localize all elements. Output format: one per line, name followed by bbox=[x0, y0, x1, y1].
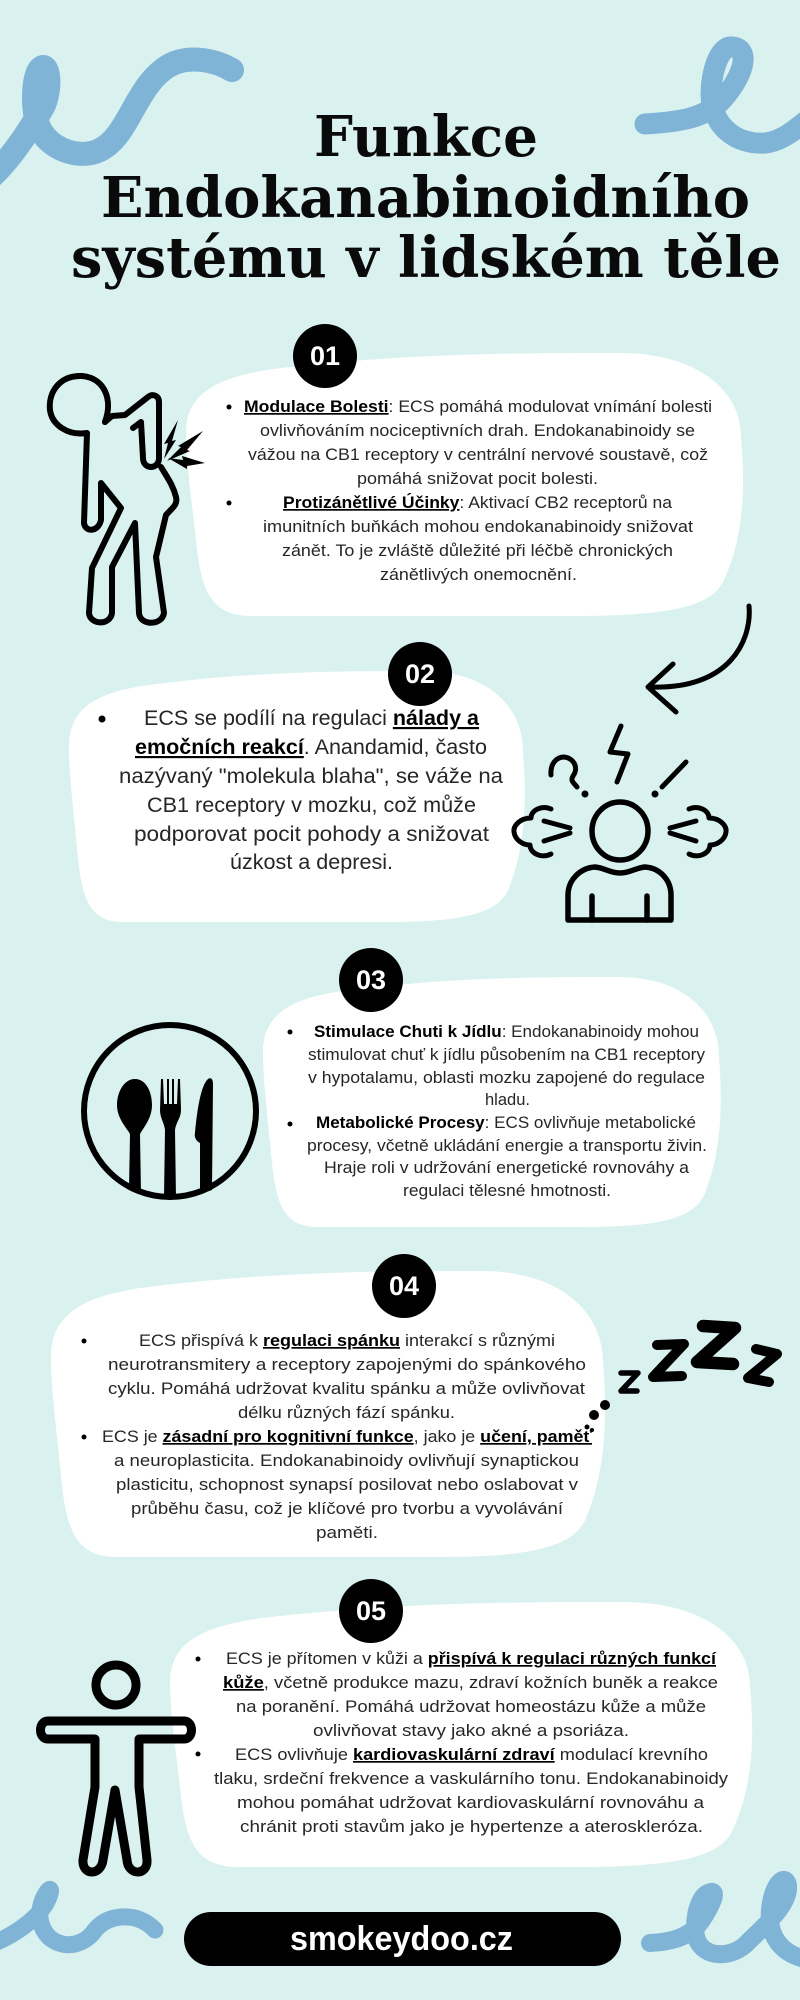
badge 05 bbox=[339, 1579, 403, 1643]
footer pill: website bbox=[184, 1912, 621, 1966]
squiggle: bottom left bbox=[0, 1889, 155, 1945]
squiggle: top right bbox=[645, 47, 800, 143]
text block 03 bbox=[288, 1022, 707, 1200]
footer pill: website: smokeydoo.cz bbox=[290, 1920, 513, 1958]
text block 03: Metabolické Procesy: ECS ovlivňuje metabolické bbox=[316, 1113, 696, 1132]
text block 02: nazývaný "molekula blaha", se váže na bbox=[119, 764, 503, 788]
text block 02: podporovat pocit pohody a snižovat bbox=[134, 822, 489, 846]
text block 03: v hypotalamu, oblasti mozku zapojené do regulace bbox=[308, 1068, 705, 1087]
text block 04: ECS přispívá k regulaci spánku interakcí s různými bbox=[139, 1331, 555, 1350]
text block 03: procesy, včetně ukládání energie a transportu živin. bbox=[307, 1136, 707, 1155]
text block 01: zánět. To je zvláště důležité při léčbě chronických bbox=[282, 541, 673, 560]
title: Funkce bbox=[314, 104, 538, 170]
text block 04: cyklu. Pomáhá udržovat kvalitu spánku a může ovlivňovat bbox=[108, 1379, 585, 1398]
text block 01: imunitních buňkách mohou endokanabinoidy snižovat bbox=[263, 517, 693, 536]
text block 01 bbox=[226, 397, 712, 584]
text block 03: hladu. bbox=[485, 1090, 530, 1109]
text block 05: kůže, včetně produkce mazu, zdraví kožních buněk a reakce bbox=[223, 1673, 718, 1692]
badge 01: 01 bbox=[310, 341, 340, 371]
text block 01: ovlivňováním nociceptivních drah. Endokanabinoidy se bbox=[260, 421, 695, 440]
text block 03: stimulovat chuť k jídlu působením na CB1 receptory bbox=[308, 1045, 706, 1064]
squiggle: bottom right bbox=[650, 1880, 800, 1960]
panel: 02 mood bbox=[69, 642, 525, 922]
text block 01: Protizánětlivé Účinky : Aktivací CB2 receptorů na bbox=[283, 493, 673, 512]
icon: standing body figure bbox=[40, 1665, 192, 1872]
text block 05: na poranění. Pomáhá udržovat homeostázu kůže a může bbox=[236, 1697, 706, 1716]
panel: 05 skin and cardiovascular bbox=[170, 1579, 752, 1867]
text block 02: úzkost a depresi. bbox=[230, 850, 393, 874]
text block 04: délku různých fází spánku. bbox=[238, 1403, 455, 1422]
text block 03: Stimulace Chuti k Jídlu: Endokanabinoidy mohou bbox=[314, 1022, 699, 1041]
text block 03: Hraje roli v udržování energetické rovnováhy a bbox=[324, 1158, 690, 1177]
text block 01: Modulace Bolesti : ECS pomáhá modulovat vnímání bolesti bbox=[244, 397, 712, 416]
text block 03: regulaci tělesné hmotnosti. bbox=[403, 1181, 611, 1200]
text block 05: ECS je přítomen v kůži a přispívá k regulaci různých funkcí bbox=[226, 1649, 717, 1668]
text block 01: zánětlivých onemocnění. bbox=[380, 565, 577, 584]
title: Endokanabinoidního bbox=[101, 165, 750, 231]
squiggle: top left bbox=[0, 60, 232, 178]
icon: sleeping zzz bbox=[584, 1326, 777, 1432]
icon: person with back pain bbox=[50, 376, 205, 623]
text block 05 bbox=[196, 1649, 729, 1836]
knife bbox=[195, 1078, 213, 1194]
text block 05: ovlivňovat stavy jako akné a psoriáza. bbox=[313, 1721, 629, 1740]
title bbox=[71, 104, 781, 291]
text block 02: CB1 receptory v mozku, což může bbox=[147, 793, 476, 817]
panel: 03 appetite and metabolism bbox=[263, 948, 721, 1227]
badge 01 bbox=[293, 324, 357, 388]
badge 02: 02 bbox=[405, 659, 435, 689]
text block 04: ECS je zásadní pro kognitivní funkce , jako je učení, paměť bbox=[102, 1427, 593, 1446]
text block 02: ECS se podílí na regulaci nálady a bbox=[144, 706, 480, 730]
arrow: curved pointing to section 02 bbox=[648, 606, 749, 712]
text block 04: paměti. bbox=[316, 1523, 378, 1542]
text block 01: pomáhá snižovat pocit bolesti. bbox=[357, 469, 598, 488]
text block 05: chránit proti stavům jako je hypertenze a ateroskleróza. bbox=[240, 1817, 703, 1836]
text block 04: plasticitu, schopnost synapsí posilovat nebo oslabovat v bbox=[116, 1475, 579, 1494]
badge 03 bbox=[339, 948, 403, 1012]
badge 03: 03 bbox=[356, 965, 386, 995]
icon: stressed person bbox=[514, 726, 726, 920]
badge 04: 04 bbox=[389, 1271, 419, 1301]
text block 04: neurotransmitery a receptory zapojenými do spánkového bbox=[108, 1355, 586, 1374]
panel: 01 pain modulation bbox=[186, 324, 743, 616]
text block 04: a neuroplasticita. Endokanabinoidy ovlivňují synaptickou bbox=[114, 1451, 579, 1470]
text block 04: průběhu času, což je klíčové pro tvorbu a vyvolávání bbox=[131, 1499, 563, 1518]
fork bbox=[160, 1079, 181, 1198]
text block 02: emočních reakcí. Anandamid, často bbox=[135, 735, 487, 759]
text block 05: mohou pomáhat udržovat kardiovaskulární rovnováhu a bbox=[237, 1793, 705, 1812]
text block 01: vážou na CB1 receptory v centrální nervové soustavě, což bbox=[248, 445, 708, 464]
panel: 04 sleep and cognition bbox=[51, 1254, 605, 1557]
title: systému v lidském těle bbox=[71, 225, 781, 291]
text block 02 bbox=[98, 706, 503, 874]
text block 04 bbox=[82, 1331, 593, 1542]
badge 04 bbox=[372, 1254, 436, 1318]
spoon bbox=[117, 1079, 152, 1194]
icon: plate with cutlery bbox=[84, 1025, 256, 1198]
text block 05: ECS ovlivňuje kardiovaskulární zdraví modulací krevního bbox=[235, 1745, 708, 1764]
badge 02 bbox=[388, 642, 452, 706]
text block 05: tlaku, srdeční frekvence a vaskulárního tonu. Endokanabinoidy bbox=[214, 1769, 729, 1788]
badge 05: 05 bbox=[356, 1596, 386, 1626]
